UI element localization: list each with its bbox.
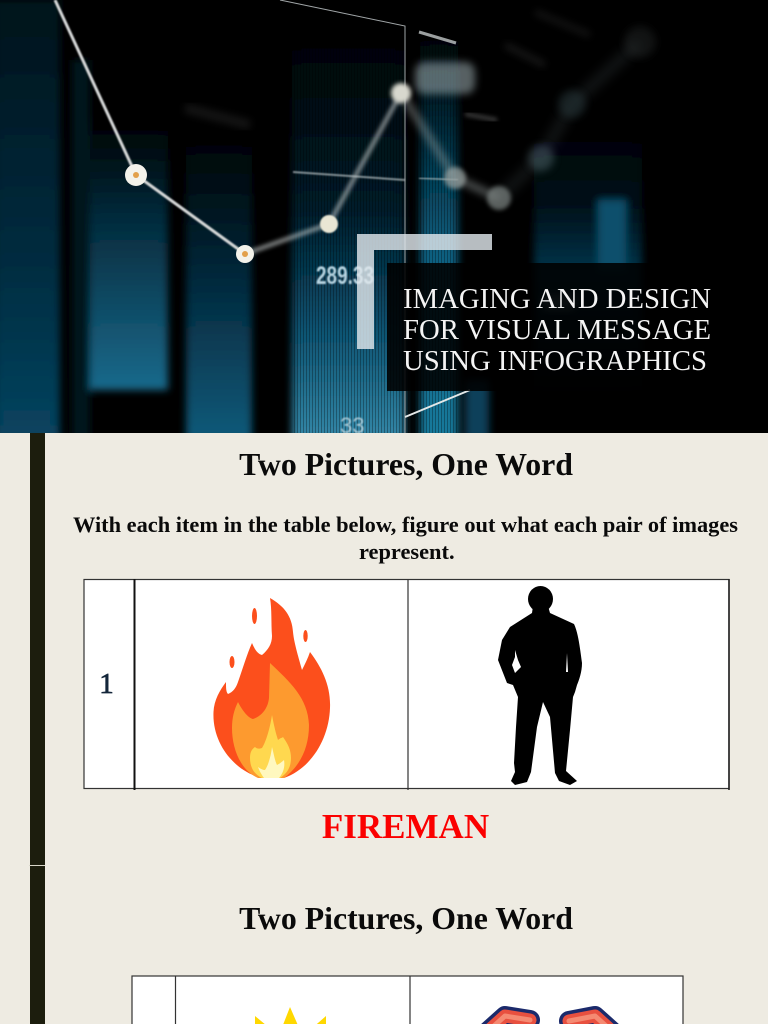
heading 2: Two Pictures, One Word — [239, 901, 573, 936]
answer: FIREMAN: FIREMAN — [322, 807, 489, 846]
icon: fire — [213, 598, 330, 778]
lower slide background — [0, 433, 768, 1024]
title text: FOR VISUAL MESSAGE — [403, 314, 711, 346]
table 2 — [132, 976, 683, 1024]
table 1 — [84, 579, 729, 790]
icon: flexed arm left — [465, 1016, 530, 1024]
chart data points — [125, 26, 656, 263]
chart line: blurred segment — [401, 93, 499, 198]
screen edge highlights — [185, 0, 590, 433]
blurred label smudges — [415, 62, 576, 310]
title box — [387, 263, 740, 391]
heading 1: Two Pictures, One Word — [239, 447, 573, 482]
lower chart value label: 33 — [340, 413, 364, 438]
title text: USING INFOGRAPHICS — [403, 345, 707, 377]
chart line: far blurred segment — [499, 42, 640, 198]
instruction text: represent. — [359, 539, 455, 564]
icon: sun — [255, 1007, 326, 1024]
left sidebar bar — [29, 433, 45, 1024]
title text: IMAGING AND DESIGN — [403, 283, 711, 315]
chart line: sharp segment — [55, 0, 245, 254]
icon: man silhouette — [498, 586, 582, 785]
chart value label: 289.33 — [316, 262, 374, 290]
title bracket — [357, 234, 492, 349]
blue screen columns — [0, 0, 642, 440]
instruction text: With each item in the table below, figure out what each pair of images — [73, 512, 738, 537]
icon: flexed arm right — [569, 1016, 635, 1024]
chart line: middle segment — [245, 93, 401, 254]
vertical scan lines — [292, 20, 458, 433]
hero photo: blurred financial chart — [0, 0, 768, 440]
row number: 1 — [99, 668, 114, 700]
